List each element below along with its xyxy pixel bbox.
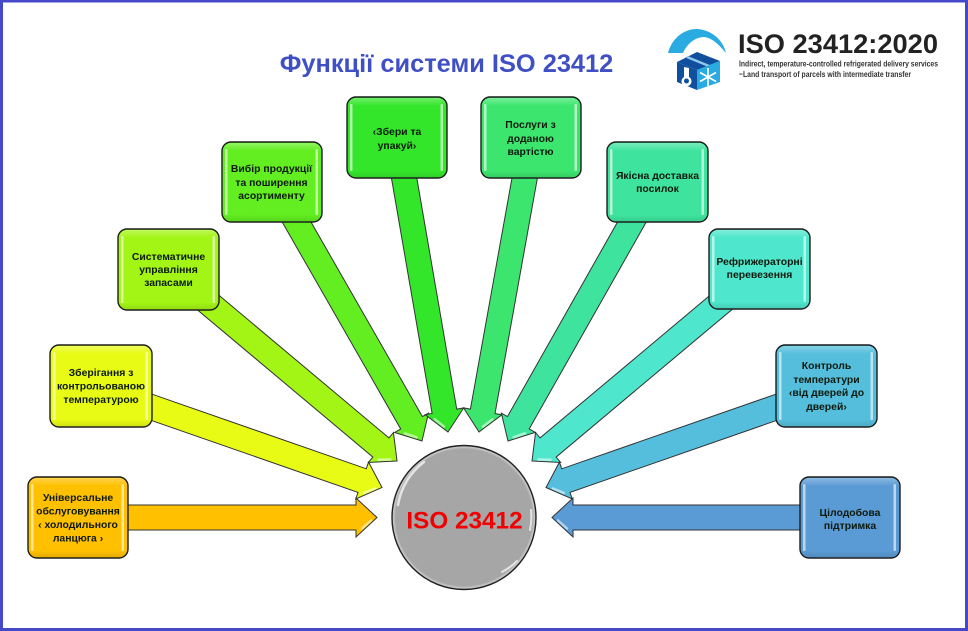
box: door to door temperature control: дверей› — [806, 402, 847, 413]
logo: ISO 23412:2020 — [668, 29, 938, 90]
icon: refrigerated parcel — [668, 29, 726, 90]
box: systematic inventory management: Систематичне — [132, 252, 205, 263]
box: systematic inventory management — [118, 229, 219, 310]
box: product selection and assortment: Вибір продукції — [231, 163, 313, 175]
box: universal cold chain service: Універсальне — [43, 493, 113, 504]
box: pick and pack — [347, 97, 447, 178]
box: door to door temperature control: ‹від дверей до — [789, 388, 864, 399]
arrow: pick and pack to centre — [382, 160, 467, 435]
box: systematic inventory management: управління — [139, 265, 198, 276]
logo subtitle line two: −Land transport of parcels with intermediate transfer — [739, 69, 912, 79]
box: controlled temperature storage — [50, 345, 152, 427]
box: universal cold chain service: ланцюга › — [53, 534, 103, 544]
box: door to door temperature control: температури — [793, 375, 860, 386]
box: universal cold chain service — [28, 477, 128, 558]
box: systematic inventory management: запасами — [144, 278, 193, 289]
arrow: assortment to centre — [272, 200, 439, 451]
box: controlled temperature storage: температурою — [63, 395, 139, 406]
central circle — [392, 446, 536, 590]
box: quality parcel delivery: посилок — [636, 184, 680, 195]
box: refrigerated transport — [709, 229, 810, 309]
arrow: storage to centre — [127, 383, 388, 506]
arrow: value added services to centre — [460, 160, 547, 435]
box: value added services: доданою — [507, 134, 554, 145]
box: product selection and assortment: асортименту — [238, 191, 305, 202]
box: value added services: Послуги з — [505, 120, 556, 131]
box: door to door temperature control: Контроль — [802, 361, 851, 372]
box: refrigerated transport: перевезення — [727, 270, 792, 281]
box: 24 hour support — [800, 477, 900, 558]
centre label: ISO 23412 — [406, 508, 523, 534]
title: Функції системи ISO 23412 — [280, 50, 613, 78]
box: controlled temperature storage: Зберігання з — [69, 367, 133, 379]
arrow: temperature control to centre — [540, 383, 801, 506]
logo heading: ISO 23412:2020 — [738, 29, 938, 59]
box: value added services — [481, 97, 581, 178]
box: product selection and assortment: та поширення — [235, 178, 308, 189]
box: product selection and assortment — [222, 142, 322, 222]
arrow: refrigerated transport to centre — [519, 281, 741, 476]
box: door to door temperature control — [776, 345, 877, 427]
box: quality parcel delivery — [607, 142, 708, 222]
arrow: cold chain to centre — [80, 498, 377, 537]
box: universal cold chain service: ‹ холодильного — [38, 520, 118, 531]
arrow: inventory to centre — [188, 281, 410, 476]
box: refrigerated transport: Рефрижераторні — [716, 256, 803, 268]
box: 24 hour support: підтримка — [824, 521, 876, 532]
box: universal cold chain service: обслуговування — [36, 506, 120, 518]
box: 24 hour support: Цілодобова — [820, 507, 881, 519]
arrow: parcel delivery to centre — [491, 200, 656, 451]
box: pick and pack: ‹Збери та — [373, 126, 422, 138]
arrow: 24 hour support to centre — [552, 498, 820, 537]
box: pick and pack: упакуй› — [378, 141, 416, 152]
box: quality parcel delivery: Якісна доставка — [616, 171, 699, 182]
box: value added services: вартістю — [508, 147, 554, 158]
box: controlled temperature storage: контрольованою — [57, 382, 145, 392]
